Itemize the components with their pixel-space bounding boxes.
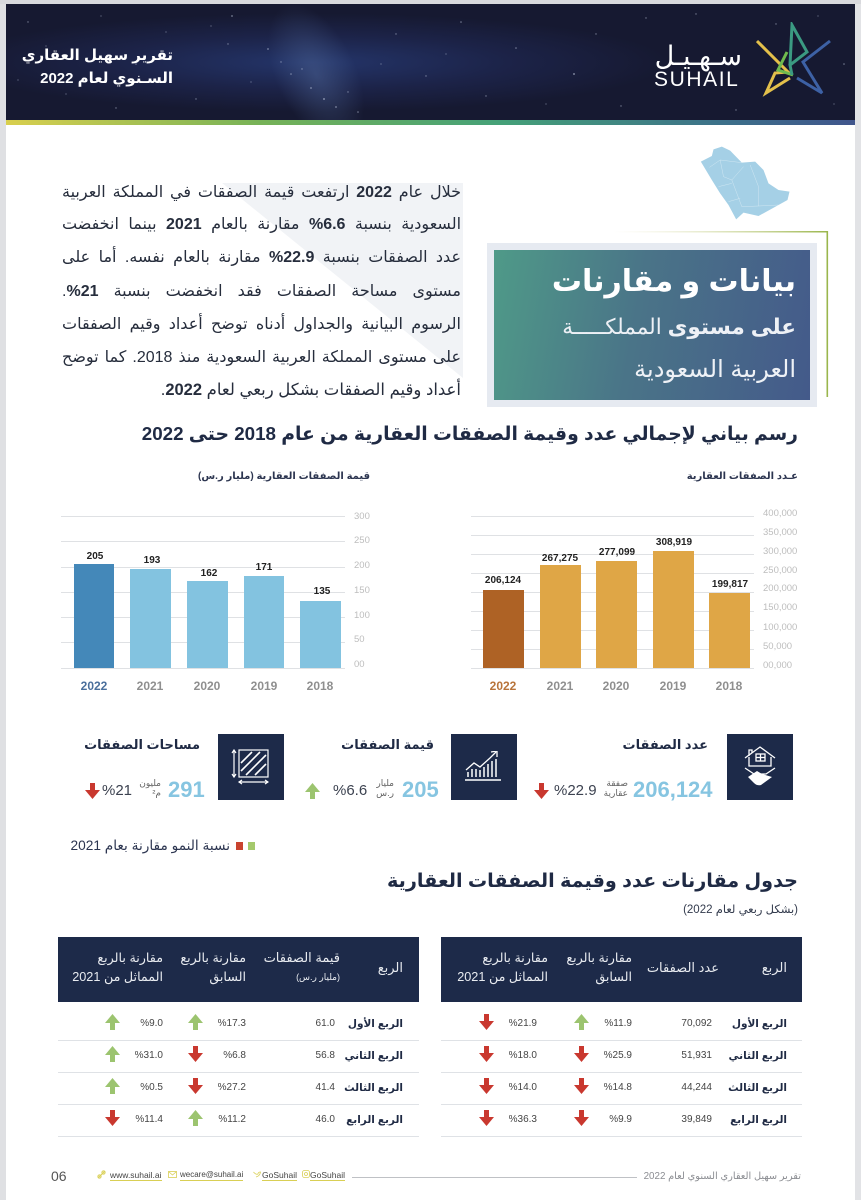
KPI unit: م²: [152, 788, 161, 798]
row: first quarter: [58, 1008, 419, 1041]
row: second quarter: الربع الثاني: [345, 1050, 403, 1062]
chart title: عـدد الصفقات العقارية: [687, 471, 798, 482]
bar 2021: [540, 565, 581, 668]
row: second quarter: 56.8: [316, 1050, 335, 1061]
chart: number of transactions: [471, 471, 798, 693]
icon: instagram: [302, 1170, 310, 1178]
website link: www.suhail.ai: [110, 1170, 162, 1180]
value 2021: 193: [144, 555, 160, 566]
intro paragraph: عدد الصفقات بنسبة 22.9% مقارنة بالعام نفسه. أما على: [62, 249, 461, 266]
row: second quarter: الربع الثاني: [729, 1050, 787, 1062]
twitter handle: GoSuhail: [262, 1170, 297, 1180]
y axis labels: 100: [354, 610, 370, 621]
instagram handle: GoSuhail: [310, 1170, 345, 1180]
year labels: 2018: [307, 679, 333, 693]
row: fourth quarter: [58, 1104, 419, 1137]
icon: down arrow: [574, 1046, 589, 1062]
row: second quarter: %31.0: [135, 1050, 163, 1061]
year labels: 2020: [603, 679, 629, 693]
row: first quarter: 70,092: [681, 1018, 712, 1029]
y axis labels: 300: [354, 511, 370, 522]
row: second quarter: %25.9: [604, 1050, 632, 1061]
chart: value of transactions: [61, 471, 370, 693]
KPI number: 206,124: [633, 777, 713, 802]
page number: 06: [51, 1168, 67, 1184]
row: first quarter: 61.0: [316, 1018, 335, 1029]
table header: السابق: [595, 970, 632, 984]
y axis labels: 200: [354, 560, 370, 571]
icon: down arrow: [479, 1110, 494, 1126]
y axis labels: 50,000: [763, 641, 792, 652]
y axis labels: 350,000: [763, 527, 797, 538]
table header: الربع: [378, 960, 403, 975]
value 2022: 206,124: [485, 575, 521, 586]
KPI unit: [376, 778, 394, 798]
table header: (مليار ر.س): [296, 972, 340, 982]
table header: مقارنة بالربع: [180, 951, 246, 965]
year labels: 2018: [716, 679, 742, 693]
bar 2022: [74, 564, 114, 668]
year labels: 2020: [194, 679, 220, 693]
year labels: 2022: [81, 679, 107, 693]
header title: [22, 47, 173, 87]
icon: down arrow: [574, 1110, 589, 1126]
section heading: tables: جدول مقارنات عدد وقيمة الصفقات العقارية: [387, 871, 798, 892]
icon: twitter: [253, 1171, 261, 1178]
legend text: نسبة النمو مقارنة بعام 2021: [71, 838, 230, 853]
intro paragraph: السعودية بنسبة 6.6% مقارنة بالعام 2021 بينما انخفضت: [62, 216, 461, 233]
legend: [71, 838, 255, 854]
y axis labels: 00,000: [763, 660, 792, 671]
page edge: right: [855, 0, 861, 1200]
title line 2: السـنوي لعام 2022: [40, 70, 173, 87]
table header: مقارنة بالربع: [97, 951, 163, 965]
icon: up arrow: [574, 1014, 589, 1030]
KPI: number of transactions: [534, 734, 793, 802]
icon: down arrow: [105, 1110, 120, 1126]
footer: [50, 1162, 802, 1188]
icon: growth chart: [451, 734, 517, 800]
y axis labels: 250: [354, 535, 370, 546]
row: first quarter: الربع الأول: [348, 1018, 403, 1030]
row: first quarter: الربع الأول: [732, 1018, 787, 1030]
title card subheading line 2: العربية السعودية: [634, 356, 796, 383]
table header: مقارنة بالربع: [482, 951, 548, 965]
table header: السابق: [209, 970, 246, 984]
icon: down arrow: [479, 1046, 494, 1062]
bar 2019: [244, 576, 284, 668]
y axis labels: [354, 511, 370, 670]
gradient strip: [6, 120, 855, 125]
footer report title: تقرير سهيل العقاري السنوي لعام 2022: [644, 1171, 801, 1182]
row: third quarter: الربع الثالث: [344, 1082, 403, 1094]
row: first quarter: [441, 1008, 802, 1041]
y axis labels: 150,000: [763, 602, 797, 613]
bar 2018: [300, 601, 341, 668]
KPI percent: %6.6: [333, 782, 367, 799]
y axis labels: 400,000: [763, 508, 797, 519]
icon: up arrow: [305, 783, 320, 799]
logo star mark: [756, 22, 831, 97]
section subheading: (بشكل ربعي لعام 2022): [683, 904, 798, 916]
y axis labels: 250,000: [763, 565, 797, 576]
bar 2022: [483, 590, 524, 668]
logo: Suhail: [654, 22, 831, 97]
KPI label: عدد الصفقات: [623, 737, 708, 752]
value 2020: 277,099: [599, 547, 635, 558]
KPI unit: عقارية: [604, 788, 628, 798]
bar 2018: [709, 593, 750, 668]
starry sky background: [6, 4, 855, 120]
row: third quarter: 41.4: [316, 1082, 335, 1093]
icon: link: [97, 1170, 106, 1179]
row: second quarter: %6.8: [223, 1050, 246, 1061]
logo wordmark latin: SUHAIL: [654, 68, 739, 91]
row: fourth quarter: [441, 1104, 802, 1137]
y axis labels: 200,000: [763, 583, 797, 594]
row: first quarter: %9.0: [140, 1018, 163, 1029]
row: fourth quarter: الربع الرابع: [730, 1114, 787, 1126]
year labels: 2022: [490, 679, 516, 693]
KPI unit: ر.س: [376, 788, 394, 798]
icon: down arrow: [188, 1046, 203, 1062]
page edge: top: [0, 0, 861, 4]
logo wordmark arabic: سـهـيـل: [655, 41, 742, 71]
table header: [441, 937, 802, 1002]
row: first quarter: %21.9: [509, 1018, 537, 1029]
row: fourth quarter: 46.0: [316, 1114, 335, 1125]
KPI: area of transactions: [84, 734, 284, 802]
table header: مقارنة بالربع: [566, 951, 632, 965]
year labels: [490, 679, 742, 693]
bar 2021: [130, 569, 171, 668]
map of Saudi Arabia: [700, 146, 790, 220]
row: third quarter: %14.8: [604, 1082, 632, 1093]
table header: [58, 937, 419, 1002]
value 2019: 171: [256, 562, 272, 573]
KPI: value of transactions: [305, 734, 517, 802]
value 2018: 135: [314, 586, 330, 597]
icon: mail: [168, 1171, 177, 1178]
KPI label: قيمة الصفقات: [341, 737, 434, 752]
KPI percent: %21: [102, 782, 132, 799]
value 2021: 267,275: [542, 553, 578, 564]
table header: المماثل من 2021: [457, 970, 548, 984]
icon: down arrow: [85, 783, 100, 799]
y axis labels: 00: [354, 659, 365, 670]
value 2019: 308,919: [656, 537, 692, 548]
value 2020: 162: [201, 568, 217, 579]
KPI number: 291: [168, 777, 205, 802]
year labels: 2021: [137, 679, 163, 693]
title card accent line: [634, 231, 828, 397]
y axis labels: 50: [354, 634, 365, 645]
intro paragraph: [62, 184, 461, 399]
row: second quarter: %18.0: [509, 1050, 537, 1061]
row: third quarter: [58, 1072, 419, 1105]
year labels: 2021: [547, 679, 573, 693]
KPI unit: مليون: [139, 778, 161, 788]
intro paragraph: خلال عام 2022 ارتفعت قيمة الصفقات في المملكة العربية: [62, 184, 461, 201]
title card: [487, 243, 817, 407]
intro paragraph: أعداد وقيم الصفقات بشكل ربعي لعام 2022.: [161, 381, 461, 399]
row: second quarter: [58, 1040, 419, 1073]
row: first quarter: %11.9: [604, 1018, 632, 1029]
bar 2020: [187, 581, 228, 668]
icon: down arrow: [479, 1078, 494, 1094]
table: value of transactions by quarter: [58, 937, 419, 1137]
value 2018: 199,817: [712, 579, 748, 590]
KPI unit: [604, 778, 628, 798]
title card gradient panel: [494, 250, 810, 400]
y axis labels: 300,000: [763, 546, 797, 557]
bar 2019: [653, 551, 694, 668]
row: third quarter: [441, 1072, 802, 1105]
page edge: left: [0, 0, 6, 1200]
icon: down arrow: [574, 1078, 589, 1094]
header banner: [6, 4, 855, 125]
row: second quarter: 51,931: [681, 1050, 712, 1061]
table header: عدد الصفقات: [647, 960, 719, 975]
section heading: charts: رسم بياني لإجمالي عدد وقيمة الصفقات العقارية من عام 2018 حتى 2022: [142, 423, 798, 444]
email link: wecare@suhail.ai: [180, 1170, 243, 1179]
table header: قيمة الصفقات: [264, 950, 340, 965]
KPI unit: [139, 778, 161, 798]
intro paragraph: الرسوم البيانية والجداول أدناه توضح أعداد وقيم الصفقات: [62, 316, 461, 333]
table header: المماثل من 2021: [72, 970, 163, 984]
row: third quarter: 44,244: [681, 1082, 712, 1093]
KPI unit: صفقة: [606, 778, 628, 788]
title card heading: بيانات و مقارنات: [552, 265, 796, 298]
icon: up arrow: [188, 1110, 203, 1126]
intro paragraph: مستوى مساحة الصفقات فقد انخفضت بنسبة 21%.: [62, 283, 461, 300]
decorative triangle: [222, 183, 463, 378]
KPI percent: %22.9: [554, 782, 597, 799]
icon: house and handshake: [727, 734, 793, 800]
icon: up arrow: [105, 1078, 120, 1094]
year labels: [81, 679, 333, 693]
table header: الربع: [762, 960, 787, 975]
icon: up arrow: [188, 1014, 203, 1030]
icon: area: [218, 734, 284, 800]
title line 1: تقرير سهيل العقاري: [22, 47, 173, 64]
row: fourth quarter: %9.9: [609, 1114, 632, 1125]
row: fourth quarter: %36.3: [509, 1114, 537, 1125]
chart title: قيمة الصفقات العقارية (مليار ر.س): [198, 471, 370, 482]
row: fourth quarter: %11.2: [218, 1114, 246, 1125]
title card subheading: على مستوى المملكـــــة: [562, 315, 796, 339]
icon: down arrow: [534, 783, 549, 799]
y axis labels: 100,000: [763, 622, 797, 633]
row: fourth quarter: الربع الرابع: [346, 1114, 403, 1126]
icon: up arrow: [105, 1046, 120, 1062]
row: first quarter: %17.3: [218, 1018, 246, 1029]
row: third quarter: الربع الثالث: [728, 1082, 787, 1094]
row: third quarter: %0.5: [140, 1082, 163, 1093]
row: fourth quarter: %11.4: [135, 1114, 163, 1125]
y axis labels: [763, 508, 797, 671]
KPI unit: مليار: [376, 778, 394, 788]
icon: down arrow: [479, 1014, 494, 1030]
legend swatch red: [236, 842, 243, 850]
value 2022: 205: [87, 551, 103, 562]
intro paragraph: على مستوى المملكة العربية السعودية منذ 2018. كما توضح: [62, 349, 461, 366]
icon: down arrow: [188, 1078, 203, 1094]
table: number of transactions by quarter: [441, 937, 802, 1137]
icon: up arrow: [105, 1014, 120, 1030]
row: third quarter: %27.2: [218, 1082, 246, 1093]
year labels: 2019: [660, 679, 686, 693]
year labels: 2019: [251, 679, 277, 693]
KPI label: مساحات الصفقات: [84, 737, 200, 752]
row: third quarter: %14.0: [509, 1082, 537, 1093]
KPI number: 205: [402, 777, 439, 802]
row: fourth quarter: 39,849: [681, 1114, 712, 1125]
y axis labels: 150: [354, 585, 370, 596]
row: second quarter: [441, 1040, 802, 1073]
footer rule: [352, 1177, 637, 1178]
bar 2020: [596, 561, 637, 668]
legend swatch green: [248, 842, 255, 850]
